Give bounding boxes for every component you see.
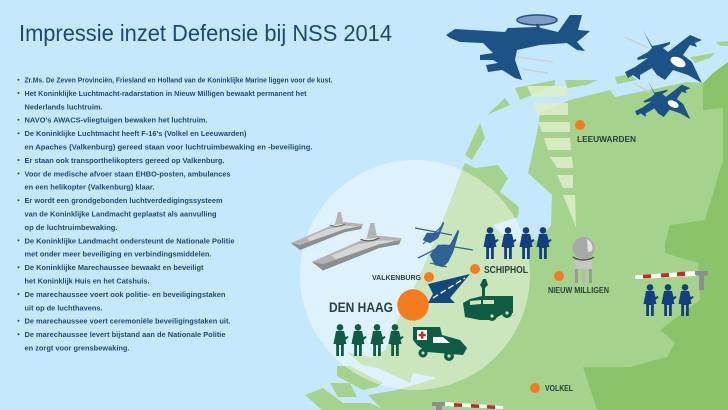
- bullet list: Nederlands luchtruim.: [24, 102, 102, 111]
- icon: air defence vehicle: [463, 275, 513, 321]
- bullet list: De Koninklijke Landmacht ondersteunt de Nationale Politie: [24, 236, 234, 245]
- bullet list: op de luchtruimbewaking.: [24, 223, 118, 232]
- bullet list: van de Koninklijke Landmacht geplaatst als aanvulling: [24, 210, 217, 218]
- bullet list: Er staan ook transporthelikopters gereed op Valkenburg.: [24, 156, 224, 165]
- bullet list: Er wordt een grondgebonden luchtverdedigingssysteem: [24, 196, 223, 205]
- bullet list: De marechaussee voert ook politie- en beveiligingstaken: [24, 290, 226, 299]
- icon: navy frigate 2: [312, 223, 402, 270]
- marker: Leeuwarden: [575, 120, 585, 130]
- label: Den Haag: DEN HAAG: [329, 299, 393, 315]
- bullet list: De marechaussee voert ceremoniële beveiligingstaken uit.: [24, 317, 230, 326]
- label: Leeuwarden: LEEUWARDEN: [577, 135, 636, 144]
- icon: F-16 small: [635, 81, 690, 119]
- bullet list: Zr.Ms. De Zeven Provinciën, Friesland en Holland van de Koninklijke Marine liggen voor de kust.: [24, 76, 332, 84]
- Germany region: [583, 62, 728, 410]
- marker: Den Haag: [397, 289, 429, 321]
- bullet list: De Koninklijke Marechaussee bewaakt en beveiligt: [24, 263, 204, 272]
- bullet list: uit op de luchthavens.: [24, 303, 102, 312]
- bullet list: De marechaussee levert bijstand aan de Nationale Politie: [24, 330, 226, 339]
- soldiers: blue group Schiphol: [484, 227, 552, 259]
- bullet list: en zorgt voor grensbewaking.: [24, 344, 130, 352]
- highlight circle: Den Haag security zone: [300, 160, 530, 390]
- bullet list: en Apaches (Valkenburg) gereed staan voor luchtruimbewaking en -beveiliging.: [24, 142, 312, 152]
- icon: radar station: [572, 237, 594, 283]
- bullet list: NAVO's AWACS-vliegtuigen bewaken het luchtruim.: [24, 116, 208, 125]
- pale stripes: air corridor: [527, 86, 576, 227]
- soldiers: blue group border: [644, 284, 694, 316]
- label: Volkel: VOLKEL: [545, 384, 573, 393]
- Zeeland islands: [305, 352, 385, 410]
- marker: Nieuw Milligen: [554, 271, 564, 281]
- bullet list: Voor de medische afvoer staan EHBO-posten, ambulances: [24, 169, 230, 178]
- Wadden islands: [465, 41, 728, 160]
- icon: F-16 large: [625, 30, 702, 83]
- bullet list: met onder meer beveiliging en verbindingsmiddelen.: [24, 250, 212, 259]
- bullet list: De Koninklijke Luchtmacht heeft F-16's (Volkel en Leeuwarden): [24, 129, 247, 138]
- icon: AWACS aircraft: [446, 15, 650, 92]
- soldiers: green group Den Haag: [334, 324, 404, 356]
- marker: Schiphol: [470, 264, 480, 274]
- icon: helicopters: [415, 222, 473, 267]
- map: Netherlands: [305, 41, 728, 410]
- marker: Volkel: [530, 383, 540, 393]
- bullet list: het Koninklijk Huis en het Catshuis.: [24, 276, 150, 286]
- icon: border barrier: [635, 271, 708, 290]
- land mass: [368, 82, 728, 410]
- marker: Valkenburg: [424, 272, 434, 282]
- icon: navy frigate 1: [291, 212, 363, 250]
- label: Valkenburg: VALKENBURG: [372, 273, 421, 282]
- label: Schiphol: SCHIPHOL: [484, 265, 528, 276]
- bullet list: en een helikopter (Valkenburg) klaar.: [24, 183, 154, 192]
- bullet list: Het Koninklijke Luchtmacht-radarstation in Nieuw Milligen bewaakt permanent het: [24, 89, 307, 98]
- icon: ambulance: [413, 327, 467, 361]
- label: Nieuw Milligen: NIEUW MILLIGEN: [548, 286, 609, 295]
- title: Impressie inzet Defensie bij NSS 2014: [19, 20, 392, 46]
- icon: runway arrow: [428, 274, 470, 303]
- icon: southern barrier: [432, 402, 503, 410]
- bullet list: [18, 76, 332, 352]
